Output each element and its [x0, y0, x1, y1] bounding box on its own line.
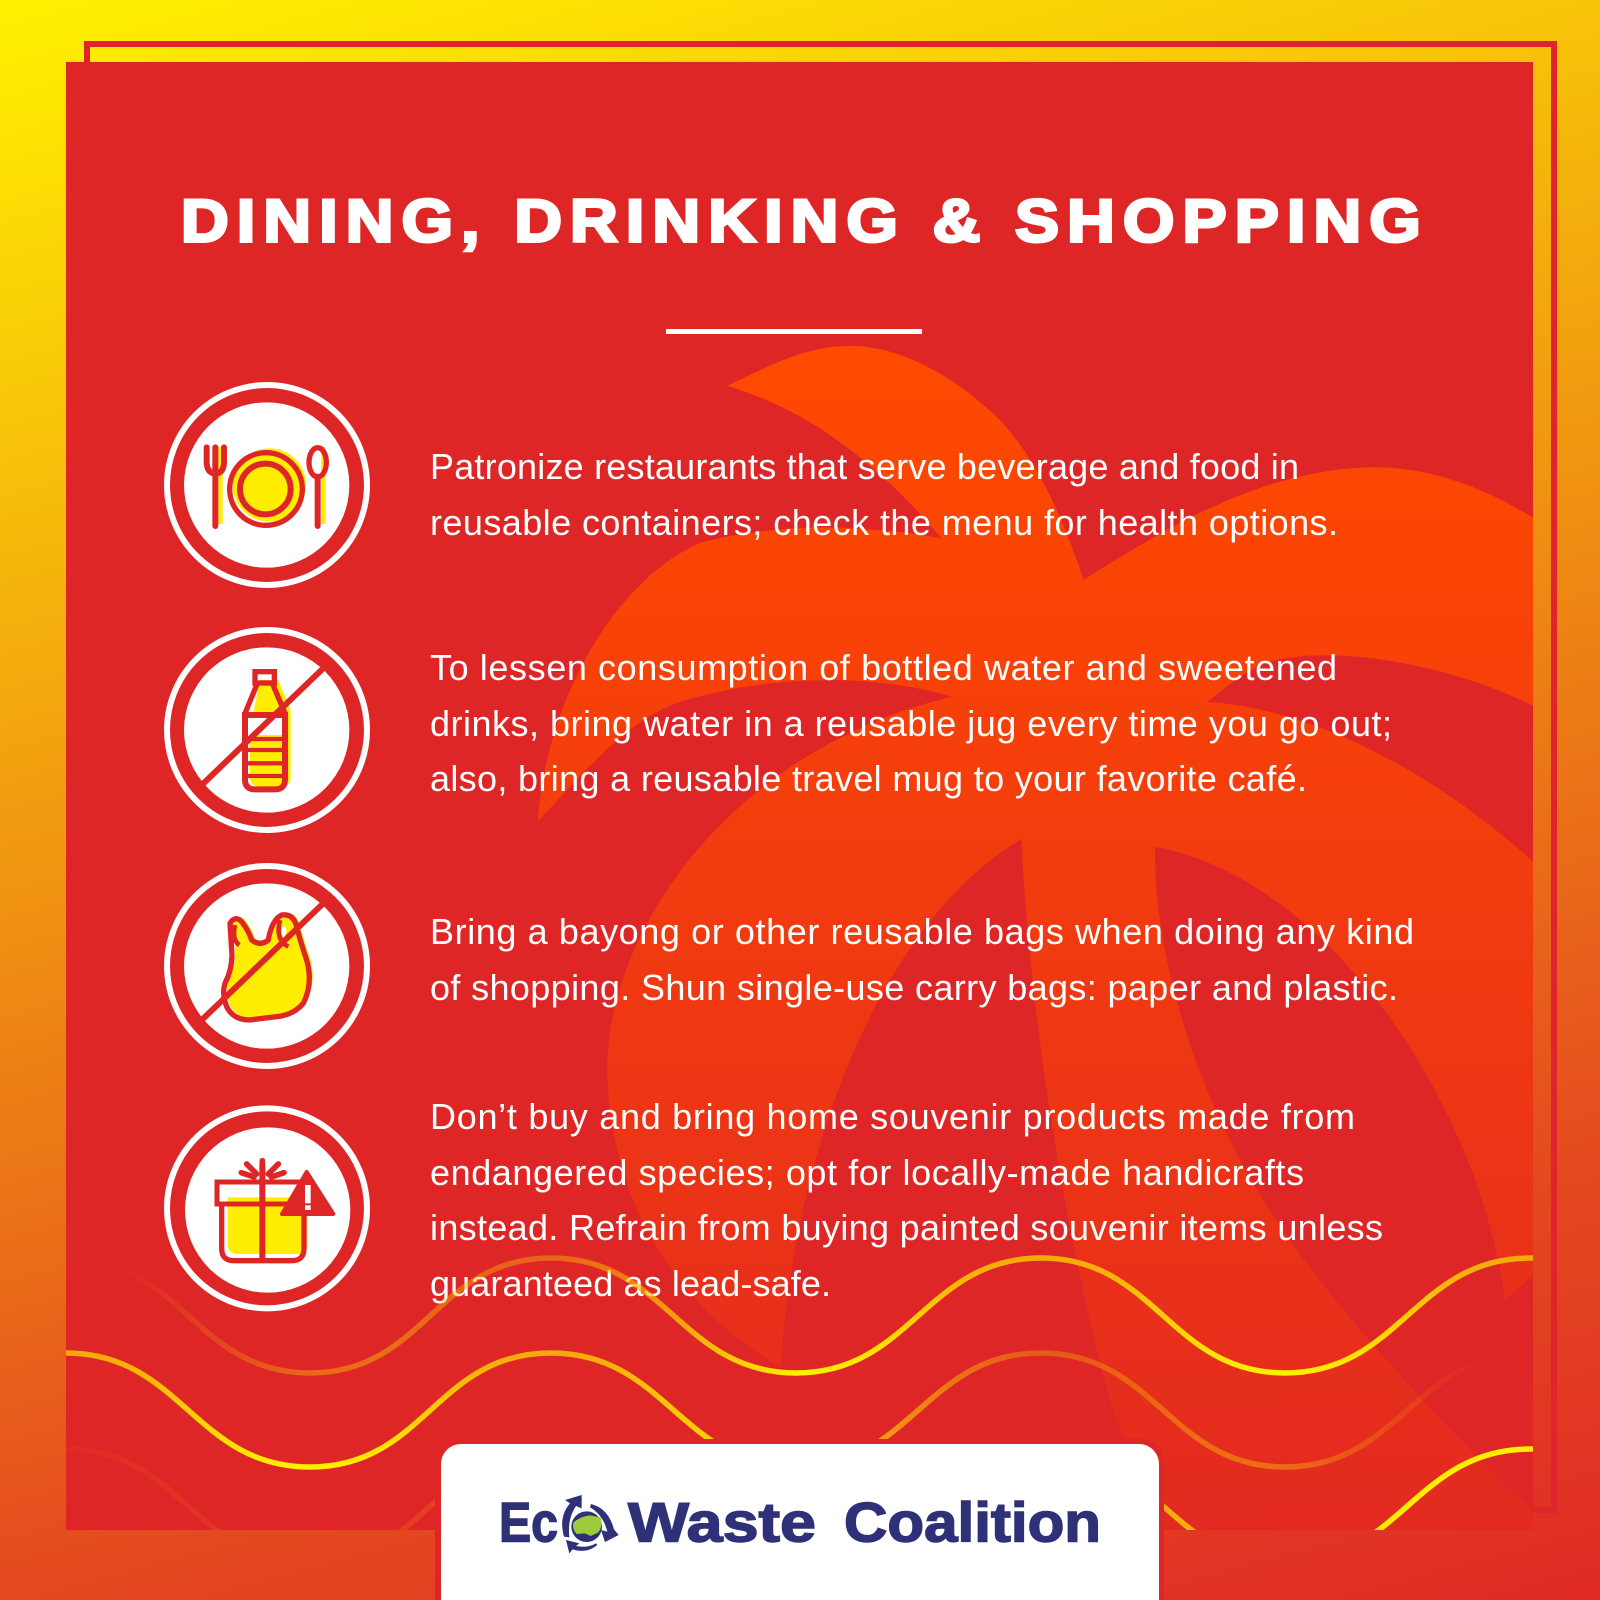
text block: bottled water: also, bring a reusable travel mug to your favorite café.: [430, 758, 1307, 799]
wave lines: [66, 1255, 1533, 1530]
text block: restaurants: Patronize restaurants that serve beverage and food in: [430, 446, 1299, 487]
text block: souvenirs: [430, 1096, 1383, 1304]
text block: bags: Bring a bayong or other reusable bags when doing any kind: [430, 911, 1414, 952]
icon: plate and cutlery: [167, 385, 367, 585]
icon: no plastic bag: [167, 866, 367, 1066]
logo: Eco Waste Coalition: Ec: [499, 1490, 558, 1554]
text block: bottled water: drinks, bring water in a reusable jug every time you go out;: [430, 703, 1392, 744]
icon: no bottled drinks: [167, 630, 367, 830]
text block: restaurants: reusable containers; check the menu for health options.: [430, 502, 1338, 543]
text block: bottled water: To lessen consumption of bottled water and sweetened: [430, 647, 1337, 688]
text block: bags: of shopping. Shun single-use carry bags: paper and plastic.: [430, 967, 1398, 1008]
text block: bags: [430, 911, 1414, 1008]
logo card: [435, 1439, 1164, 1600]
title: DINING, DRINKING & SHOPPING: [181, 188, 1421, 255]
logo: Eco Waste Coalition: [499, 1490, 1101, 1554]
text block: bottled water: [430, 647, 1392, 799]
text block: souvenirs: endangered species; opt for locally-made handicrafts: [430, 1152, 1304, 1193]
logo: Eco Waste Coalition: Waste: [628, 1490, 816, 1554]
icon: souvenir gift warning: [167, 1108, 367, 1308]
palm tree silhouette: [538, 346, 1534, 1530]
text block: souvenirs: guaranteed as lead-safe.: [430, 1263, 831, 1304]
text block: souvenirs: instead. Refrain from buying painted souvenir items unless: [430, 1207, 1383, 1248]
divider: [666, 329, 922, 334]
text block: souvenirs: Don’t buy and bring home souvenir products made from: [430, 1096, 1355, 1137]
logo: Eco Waste Coalition: Coalition: [844, 1490, 1101, 1554]
text block: restaurants: [430, 446, 1338, 543]
